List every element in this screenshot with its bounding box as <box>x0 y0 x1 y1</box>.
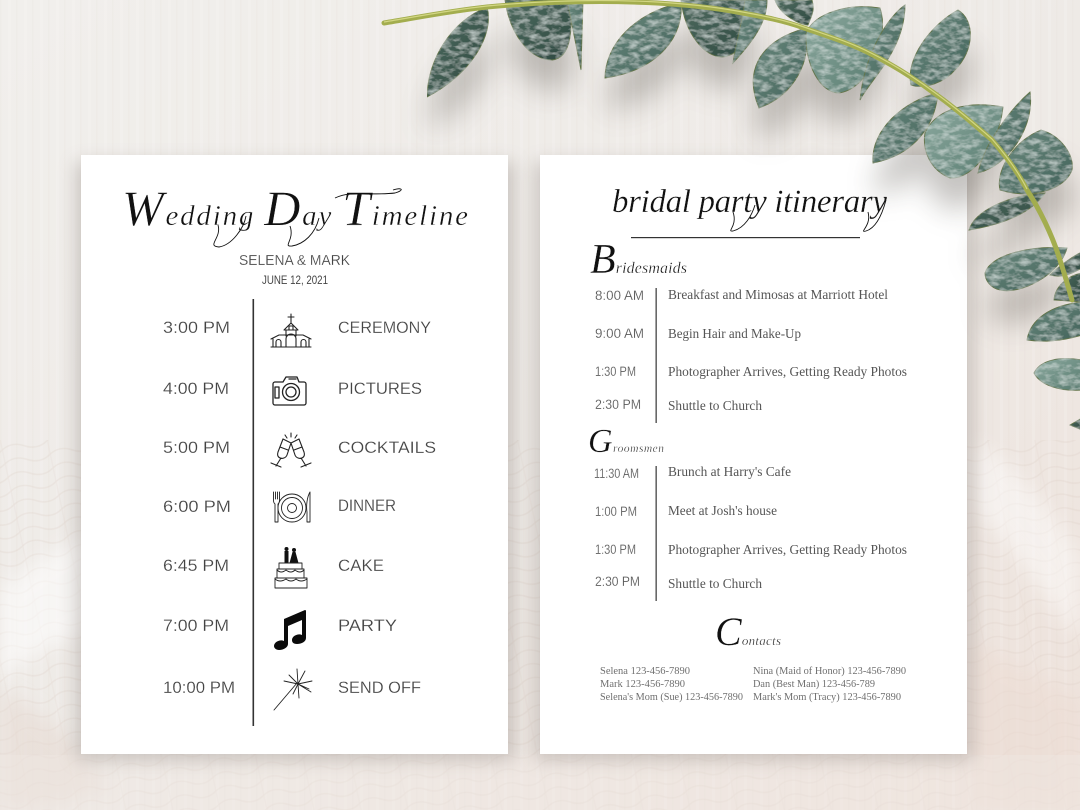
row: dinner: 6:00 PM <box>163 497 231 516</box>
contacts list: Selena's Mom (Sue) 123-456-7890 <box>600 692 743 703</box>
row: ceremony: CEREMONY <box>338 318 431 337</box>
row: cocktails <box>163 433 436 467</box>
heading: groomsmen: Groomsmen <box>588 423 664 460</box>
eucalyptus branch <box>384 0 1080 430</box>
heading: wedding day timeline: Wedding Day Timeline <box>122 180 468 236</box>
schedule: bridesmaids: Shuttle to Church <box>668 398 762 413</box>
row: ceremony <box>163 314 431 347</box>
icon: camera <box>273 377 306 405</box>
schedule: bridesmaids: Photographer Arrives, Getting Ready Photos <box>668 364 907 379</box>
heading: contacts: Contacts <box>715 609 781 654</box>
panel: wedding day timeline <box>81 155 508 754</box>
schedule: bridesmaids: 8:00 AM <box>595 288 644 303</box>
row: pictures: 4:00 PM <box>163 379 229 398</box>
row: cake: 6:45 PM <box>163 556 229 575</box>
icon: champagne glasses <box>271 433 311 467</box>
row: cocktails: COCKTAILS <box>338 438 436 457</box>
schedule: groomsmen: 11:30 AM <box>594 466 639 481</box>
text: date: JUNE 12, 2021 <box>262 273 328 287</box>
schedule: groomsmen: 2:30 PM <box>595 574 640 589</box>
row: party <box>163 610 397 650</box>
row: party: 7:00 PM <box>163 616 229 635</box>
schedule: groomsmen: Meet at Josh's house <box>668 503 777 518</box>
icon: music notes <box>274 610 306 650</box>
row: cocktails: 5:00 PM <box>163 438 230 457</box>
schedule: groomsmen: 1:30 PM <box>595 542 636 557</box>
schedule: bridesmaids: Breakfast and Mimosas at Marriott Hotel <box>668 287 888 302</box>
schedule: bridesmaids: 2:30 PM <box>595 397 641 412</box>
contacts list: Dan (Best Man) 123-456-789 <box>753 679 875 690</box>
timeline axis: groomsmen <box>656 466 657 601</box>
row: pictures: PICTURES <box>338 379 422 398</box>
schedule: bridesmaids: Begin Hair and Make-Up <box>668 326 801 341</box>
text: couple names: SELENA & MARK <box>239 252 350 269</box>
row: dinner: DINNER <box>338 496 396 515</box>
heading: bridal party itinerary: bridal party itinerary <box>612 184 887 220</box>
schedule: groomsmen: Shuttle to Church <box>668 576 762 591</box>
eucalyptus shadow <box>429 32 1074 323</box>
row: send off <box>163 669 421 710</box>
panel: card shadows <box>76 162 973 760</box>
schedule: bridesmaids <box>595 287 907 413</box>
schedule: groomsmen: Brunch at Harry's Cafe <box>668 464 791 479</box>
contacts list: Mark's Mom (Tracy) 123-456-7890 <box>753 692 901 703</box>
schedule: groomsmen: 1:00 PM <box>595 504 637 519</box>
row: dinner <box>163 492 396 522</box>
contacts list <box>600 666 906 703</box>
heading underline <box>631 237 860 238</box>
schedule: groomsmen <box>594 464 907 591</box>
row: cake: CAKE <box>338 556 384 575</box>
row: party: PARTY <box>338 616 397 635</box>
row: send off: 10:00 PM <box>163 678 235 697</box>
row: cake <box>163 547 384 588</box>
row: pictures <box>163 377 422 405</box>
icon: plate and cutlery <box>274 492 310 522</box>
contacts list: Mark 123-456-7890 <box>600 679 685 690</box>
panel: bridal party itinerary <box>540 155 967 754</box>
contacts list: Selena 123-456-7890 <box>600 666 690 677</box>
icon: church <box>271 314 311 347</box>
row: send off: SEND OFF <box>338 678 421 697</box>
icon: sparkler <box>274 669 312 710</box>
timeline axis <box>252 299 254 726</box>
schedule: bridesmaids: 9:00 AM <box>595 326 644 341</box>
timeline axis: bridesmaids <box>656 288 657 423</box>
schedule: groomsmen: Photographer Arrives, Getting Ready Photos <box>668 542 907 557</box>
row: ceremony: 3:00 PM <box>163 318 230 337</box>
icon: wedding cake <box>275 547 307 588</box>
contacts list: Nina (Maid of Honor) 123-456-7890 <box>753 666 906 677</box>
heading: bridesmaids: Bridesmaids <box>590 237 687 283</box>
schedule: bridesmaids: 1:30 PM <box>595 364 636 379</box>
